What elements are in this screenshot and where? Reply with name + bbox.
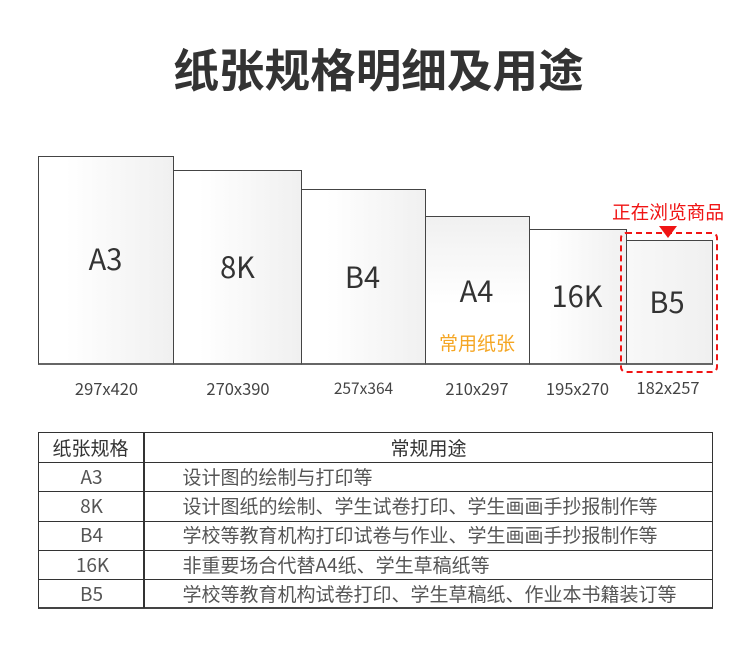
- icon: red down arrow: [659, 226, 677, 238]
- row: B4: B4: [80, 521, 103, 548]
- label: B5: B5: [649, 280, 685, 322]
- paper: 16K: [529, 229, 627, 365]
- dimension: 16K: 195x270: [546, 376, 609, 400]
- paper: B4: [301, 189, 426, 365]
- paper: A3: [38, 156, 174, 365]
- table grid: [38, 432, 713, 609]
- dimension: A3: 297x420: [75, 376, 138, 400]
- label: B4: B4: [345, 255, 380, 297]
- dimension: B4: 257x364: [334, 377, 393, 399]
- usage table: [38, 432, 713, 609]
- row: B5: 学校等教育机构试卷打印、学生草稿纸、作业本书籍装订等: [182, 580, 677, 607]
- row: 16K: 非重要场合代替A4纸、学生草稿纸等: [182, 551, 490, 578]
- paper: A4: [425, 216, 530, 365]
- label: common paper: 常用纸张: [439, 329, 515, 356]
- paper: 8K: [173, 170, 302, 365]
- label: 16K: 16K: [552, 274, 602, 316]
- row: 8K: 设计图纸的绘制、学生试卷打印、学生画画手抄报制作等: [182, 492, 658, 519]
- dimension: A4: 210x297: [445, 376, 509, 400]
- label: 8K: 8K: [220, 245, 255, 287]
- label: A4: A4: [460, 269, 493, 311]
- title: 纸张规格明细及用途: [173, 35, 584, 101]
- row: A3: A3: [80, 463, 103, 490]
- row: 16K: 16K: [76, 551, 109, 578]
- paper: B5: [626, 240, 713, 365]
- row: 8K: 8K: [80, 492, 103, 519]
- row: A3: 设计图的绘制与打印等: [182, 463, 373, 490]
- size comparison diagram: [38, 156, 724, 400]
- dimension: B5: 182x257: [636, 375, 700, 399]
- row: B5: B5: [80, 580, 103, 607]
- row: B4: 学校等教育机构打印试卷与作业、学生画画手抄报制作等: [182, 521, 658, 548]
- current item highlight: [620, 232, 718, 373]
- label: A3: A3: [89, 237, 122, 279]
- header: paper size: 纸张规格: [52, 434, 128, 461]
- row: A3: [80, 463, 373, 490]
- header: usage: 常规用途: [390, 434, 466, 461]
- dimension: 8K: 270x390: [206, 376, 270, 400]
- current item label: 正在浏览商品: [612, 198, 724, 225]
